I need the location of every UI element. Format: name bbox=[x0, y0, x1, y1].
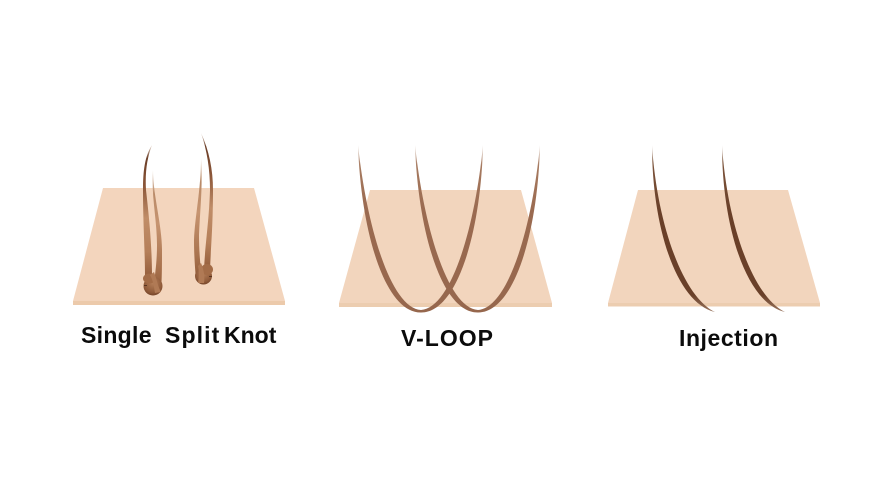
label: Single bbox=[81, 322, 152, 348]
icon: right knot hair bbox=[194, 133, 213, 284]
label: V-LOOP bbox=[401, 325, 493, 351]
icon: first loop hair bbox=[358, 145, 483, 313]
skin base bbox=[339, 190, 552, 307]
icon: second injection hair bbox=[722, 145, 785, 312]
label: Split bbox=[165, 322, 220, 348]
icon: first injection hair bbox=[652, 145, 715, 312]
panel: Injection bbox=[608, 145, 820, 351]
panel: Single Split Knot bbox=[73, 133, 285, 348]
label: Knot bbox=[224, 322, 277, 348]
icon: second loop hair bbox=[415, 145, 540, 313]
label: Injection bbox=[679, 325, 778, 351]
panel: V-LOOP bbox=[339, 145, 552, 351]
skin base bbox=[73, 188, 285, 305]
skin base bbox=[608, 190, 820, 306]
icon: left knot hair bbox=[143, 145, 162, 296]
